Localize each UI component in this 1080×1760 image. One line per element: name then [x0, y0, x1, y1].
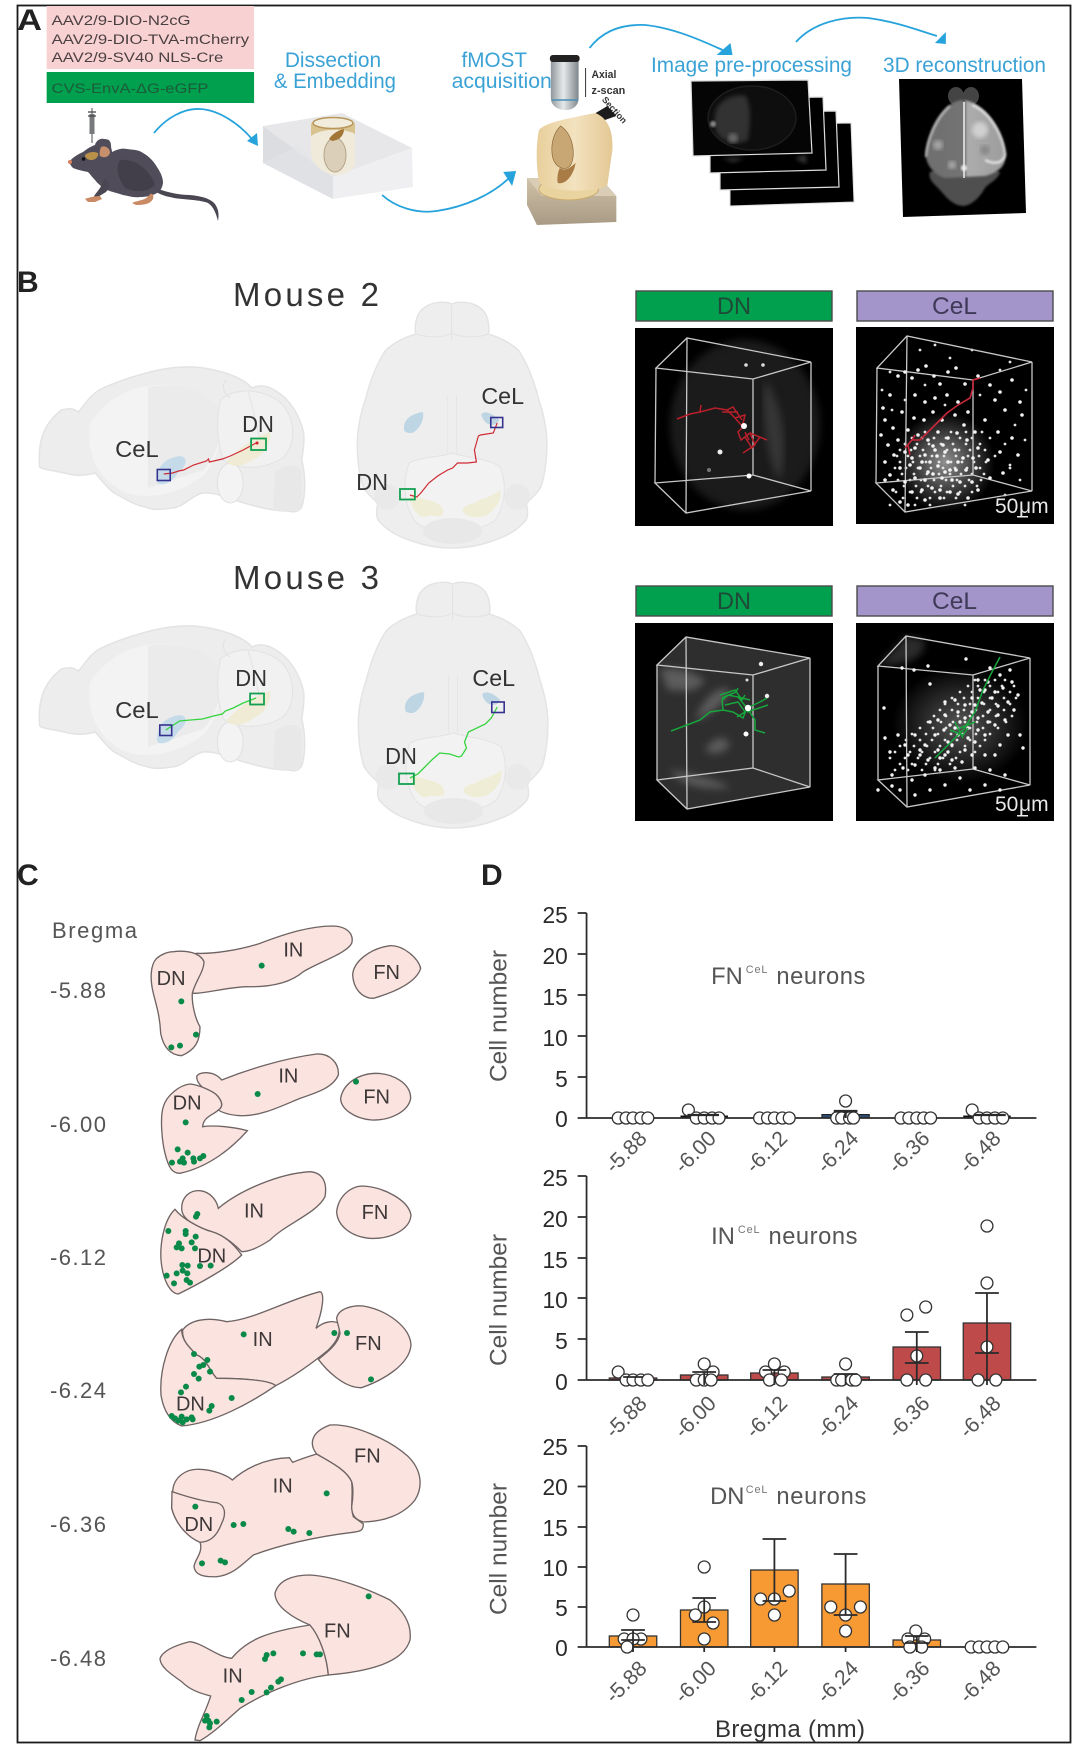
heading: fMOST acquisition [452, 49, 552, 93]
y tick labels [542, 1165, 568, 1395]
helper virus list box: AAV2/9-DIO-TVA-mCherry [52, 31, 249, 47]
heading: image pre-processing: Image pre-processing [651, 54, 852, 77]
heading: dissection and embedding: Dissection [285, 49, 381, 72]
bar chart: DN CeL neurons [486, 1434, 1036, 1708]
panel A: experimental workflow [17, 4, 1046, 225]
x tick labels: -6.48 [955, 1391, 1006, 1443]
x tick labels: -6.36 [883, 1126, 934, 1178]
brain top view, mouse 2 [356, 302, 547, 548]
data points [618, 1561, 1009, 1653]
x tick labels: -6.36 [883, 1656, 934, 1708]
y tick labels [542, 902, 568, 1132]
bregma level labels [50, 978, 106, 1671]
arrow: embedding to fMOST [382, 171, 516, 212]
y axis with ticks [578, 1446, 587, 1647]
bars [680, 1114, 1011, 1118]
rabies virus box [47, 72, 254, 103]
x tick labels: -6.24 [812, 1391, 863, 1443]
y axis title: Cell number [486, 950, 512, 1082]
brain top view, mouse 3 [358, 582, 548, 828]
bar chart: IN CeL neurons [486, 1165, 1036, 1443]
bregma level labels: -6.00 [50, 1112, 106, 1137]
brain side view, mouse 2: DN [242, 411, 274, 437]
section at bregma -6.12: FN [362, 1202, 388, 1224]
scale bar, mouse 2: 50 [995, 495, 1018, 518]
heading: Mouse 3: Mouse 3 [233, 559, 379, 596]
heading: Bregma: Bregma [52, 918, 138, 943]
icon: resin embedding block [263, 113, 413, 199]
scale bar, mouse 3: μm [1019, 793, 1049, 816]
section at bregma -6.24: DN [176, 1394, 205, 1416]
heading: fMOST acquisition: fMOST [462, 49, 527, 72]
data points [612, 1095, 1009, 1124]
y tick labels: 15 [542, 1247, 568, 1273]
y tick labels [542, 1434, 568, 1661]
panel letter B: B [17, 266, 39, 299]
header: DN, mouse 3 [636, 586, 832, 616]
panel B: single-neuron reconstructions [17, 266, 1054, 828]
x tick labels: -6.12 [741, 1126, 792, 1178]
y axis title: Cell number [486, 1483, 512, 1615]
y axis with ticks [578, 913, 587, 1118]
brain top view, mouse 3: CeL [472, 665, 515, 691]
x axis title: Bregma (mm) [715, 1716, 865, 1743]
x tick labels [601, 1126, 1006, 1178]
y tick labels: 25 [542, 1165, 568, 1191]
header: DN, mouse 3: DN [717, 588, 751, 615]
header: CeL, mouse 3 [857, 586, 1053, 616]
chart title: CeL [746, 964, 767, 976]
x tick labels: -5.88 [601, 1391, 652, 1443]
section at bregma -6.00: IN [278, 1065, 298, 1087]
section at bregma -6.00: FN [363, 1086, 390, 1108]
section at bregma -5.88: FN [373, 962, 400, 984]
y tick labels: 10 [542, 1025, 568, 1051]
3D reconstructed brain image [899, 79, 1026, 217]
y tick labels: 20 [542, 943, 568, 969]
x axis [578, 1379, 1036, 1381]
section at bregma -6.24: IN [253, 1329, 273, 1351]
brain top view, mouse 3: DN [385, 743, 417, 769]
error bars [623, 1293, 999, 1385]
y tick labels: 20 [542, 1474, 568, 1500]
x tick labels [601, 1391, 1006, 1443]
x tick labels: -6.00 [670, 1656, 721, 1708]
x axis [578, 1117, 1036, 1119]
bar chart: FN CeL neurons [486, 902, 1036, 1178]
image stack of coronal sections [691, 80, 854, 206]
chart title: CeL [746, 1484, 767, 1496]
x tick labels: -6.12 [741, 1656, 792, 1708]
scale bar, mouse 2: μm [1019, 495, 1049, 518]
x tick labels: -6.48 [955, 1126, 1006, 1178]
chart title: neurons [768, 1223, 858, 1250]
y tick labels: 5 [555, 1328, 568, 1354]
x tick labels: -6.24 [812, 1126, 863, 1178]
x tick labels: -6.24 [812, 1656, 863, 1708]
y tick labels: 20 [542, 1206, 568, 1232]
section at bregma -6.00: DN [173, 1092, 202, 1114]
micrograph: DN neuron, mouse 3 [635, 623, 833, 821]
section at bregma -6.24 [161, 1292, 411, 1426]
icon: fMOST microscope and sample: z-scan [592, 85, 625, 97]
y tick labels: 10 [542, 1555, 568, 1581]
brain top view, mouse 2: DN [356, 469, 388, 495]
brain side view, mouse 2: CeL [115, 436, 159, 462]
panel letter D: D [481, 859, 503, 892]
heading: Mouse 2: Mouse 2 [233, 276, 379, 313]
error bars [621, 1539, 929, 1652]
bregma level labels: -6.48 [50, 1646, 106, 1671]
heading: dissection and embedding [274, 49, 396, 93]
bars [609, 1323, 1011, 1380]
y tick labels: 0 [555, 1635, 568, 1661]
brain side view, mouse 2 [39, 367, 305, 512]
helper virus list box: AAV2/9-DIO-N2cG [52, 12, 191, 28]
chart title [711, 1223, 858, 1250]
x tick labels: -5.88 [601, 1126, 652, 1178]
data points [612, 1220, 1002, 1386]
arrow: pre-processing to reconstruction [796, 18, 946, 44]
section at bregma -6.48 [160, 1575, 410, 1741]
header: CeL, mouse 2 [857, 291, 1053, 321]
chart title [711, 963, 865, 990]
section at bregma -6.12: IN [244, 1201, 264, 1223]
section at bregma -6.48: IN [223, 1666, 243, 1688]
micrograph: CeL neurons, mouse 3 [856, 623, 1054, 821]
y tick labels: 0 [555, 1369, 568, 1395]
heading: 3D reconstruction: 3D reconstruction [883, 54, 1046, 77]
arrow: fMOST to image pre-processing [590, 25, 732, 55]
error bars [687, 1111, 1006, 1118]
chart title: neurons [776, 1483, 866, 1510]
scale bar, mouse 3: 50 [995, 793, 1018, 816]
micrograph: CeL neurons, mouse 2 [856, 327, 1054, 524]
brain side view, mouse 3: CeL [115, 697, 159, 723]
scale bar, mouse 2 [995, 495, 1049, 518]
brain side view, mouse 3: DN [235, 665, 267, 691]
brain side view, mouse 3 [39, 626, 305, 771]
rabies virus box: CVS-EnvA-ΔG-eGFP [52, 80, 208, 96]
heading: dissection and embedding: & Embedding [274, 70, 396, 93]
chart title: FN [711, 963, 743, 990]
bregma level labels: -5.88 [50, 978, 106, 1003]
section at bregma -6.36: FN [354, 1445, 381, 1467]
chart title: neurons [776, 963, 865, 990]
y tick labels: 10 [542, 1287, 568, 1313]
section at bregma -5.88: DN [157, 968, 186, 990]
helper virus list box: AAV2/9-SV40 NLS-Cre [52, 49, 224, 65]
section at bregma -6.36 [172, 1425, 420, 1577]
x tick labels: -6.00 [670, 1126, 721, 1178]
y tick labels: 5 [555, 1595, 568, 1621]
icon: mouse with syringe [68, 108, 219, 221]
header: CeL, mouse 3: CeL [932, 588, 977, 615]
y tick labels: 15 [542, 1515, 568, 1541]
scale bar, mouse 3 [995, 793, 1049, 816]
bregma level labels: -6.36 [50, 1512, 106, 1537]
bregma level labels: -6.12 [50, 1245, 106, 1270]
y axis with ticks [578, 1176, 587, 1380]
section at bregma -6.36: DN [184, 1514, 213, 1536]
panel letter A: A [17, 4, 42, 37]
chart title: IN [711, 1223, 735, 1250]
y tick labels: 15 [542, 984, 568, 1010]
y axis title: Cell number [486, 1234, 512, 1366]
micrograph: DN neuron, mouse 2 [635, 328, 833, 526]
y tick labels: 5 [555, 1066, 568, 1092]
bars [609, 1570, 941, 1647]
section at bregma -5.88 [151, 926, 421, 1056]
x tick labels: -6.36 [883, 1391, 934, 1443]
header: DN, mouse 2 [636, 291, 832, 321]
y tick labels: 0 [555, 1106, 568, 1132]
brain top view, mouse 2: CeL [481, 383, 524, 409]
icon: fMOST microscope and sample [527, 55, 629, 225]
arrow: injection to dissection [154, 109, 258, 146]
x tick labels: -6.00 [670, 1391, 721, 1443]
heading: fMOST acquisition: acquisition [452, 70, 552, 93]
x tick labels: -5.88 [601, 1656, 652, 1708]
section at bregma -6.12: DN [197, 1245, 226, 1267]
bregma level labels: -6.24 [50, 1378, 106, 1403]
header: DN, mouse 2: DN [717, 293, 751, 320]
panel letter C: C [17, 859, 39, 892]
chart title: DN [710, 1483, 744, 1510]
section at bregma -6.24: FN [355, 1333, 382, 1355]
section at bregma -6.48: FN [324, 1620, 351, 1642]
section at bregma -5.88: IN [283, 940, 303, 962]
section at bregma -6.00 [162, 1054, 411, 1173]
section at bregma -6.36: IN [273, 1476, 293, 1498]
x tick labels: -6.48 [955, 1656, 1006, 1708]
section at bregma -6.12 [161, 1172, 411, 1294]
header: CeL, mouse 2: CeL [932, 293, 977, 320]
icon: fMOST microscope and sample: Axial [592, 69, 616, 81]
y tick labels: 25 [542, 902, 568, 928]
x axis [578, 1647, 1036, 1652]
x tick labels [601, 1656, 1006, 1708]
helper virus list box [47, 6, 254, 69]
x tick labels: -6.12 [741, 1391, 792, 1443]
icon: fMOST microscope and sample: Section [600, 95, 629, 125]
chart title: CeL [738, 1224, 760, 1236]
chart title [710, 1483, 866, 1510]
y tick labels: 25 [542, 1434, 568, 1460]
